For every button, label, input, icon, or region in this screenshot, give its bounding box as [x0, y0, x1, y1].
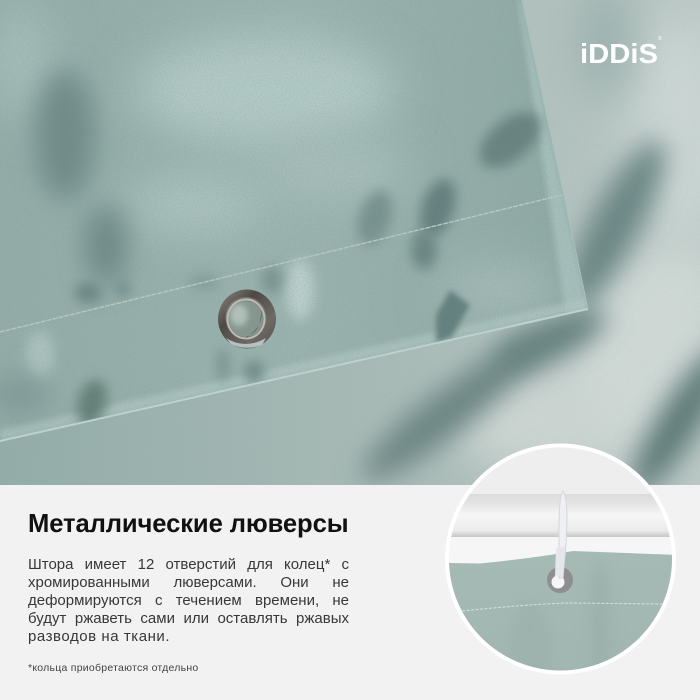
body text	[28, 556, 349, 645]
body text: будут ржаветь сами или оставлять ржавых	[28, 610, 349, 627]
body text: деформируются с течением времени, не	[28, 592, 349, 609]
logo: iDDiS: ®	[658, 35, 662, 42]
inset lens: rod, hook and curtain	[445, 444, 677, 680]
light areas	[135, 35, 395, 145]
heading: Металлические люверсы	[28, 510, 348, 538]
right edge highlight	[522, 0, 588, 309]
stitch line	[0, 195, 562, 332]
body text: разводов на ткани.	[28, 628, 170, 645]
small grommet	[547, 567, 573, 593]
right edge light strip	[518, 0, 588, 314]
lower background fabric with folds	[0, 0, 700, 503]
body text: хромированными люверсами. Они не	[28, 574, 349, 591]
curtain rod	[451, 494, 671, 537]
curtain swatch	[449, 551, 672, 670]
hook ring	[559, 491, 567, 578]
curtain hem panel with wrinkles	[0, 0, 600, 445]
swatch stitch	[462, 603, 662, 611]
hem edge highlight	[0, 309, 588, 441]
body text: Штора имеет 12 отверстий для колец* с	[28, 556, 349, 573]
footnote: *кольца приобретаются отдельно	[28, 662, 198, 674]
grommet	[218, 290, 276, 348]
dark wrinkles	[35, 70, 95, 200]
logo: iDDiS: iDDiS	[580, 38, 658, 69]
